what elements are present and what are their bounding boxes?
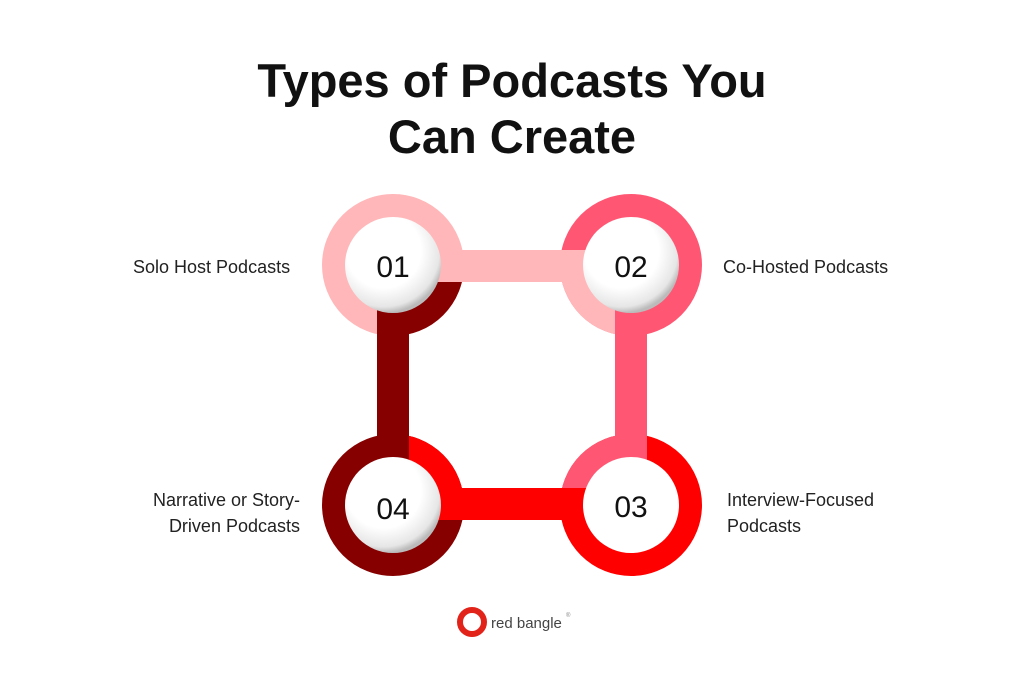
node 03: 03	[614, 491, 648, 524]
label 04: Driven Podcasts	[169, 516, 300, 536]
title	[257, 54, 767, 163]
title: Can Create	[388, 110, 636, 163]
logo: ®	[566, 612, 571, 619]
label 03: Interview-Focused	[727, 490, 874, 510]
label 04: Narrative or Story-	[153, 490, 300, 510]
label 02: Co-Hosted Podcasts	[723, 257, 888, 277]
label 03	[727, 490, 874, 536]
logo	[460, 610, 571, 634]
label 03: Podcasts	[727, 516, 801, 536]
node 04	[345, 457, 441, 553]
node 01	[345, 217, 441, 313]
title: Types of Podcasts You	[257, 54, 767, 107]
connectors	[400, 250, 615, 282]
rings	[338, 210, 448, 320]
label 04	[153, 490, 300, 536]
label 01: Solo Host Podcasts	[133, 257, 290, 277]
node 04: 04	[376, 493, 410, 526]
node 02: 02	[614, 251, 648, 284]
node 01: 01	[376, 251, 410, 284]
node 03	[583, 457, 679, 553]
diagram	[322, 194, 702, 637]
node 02	[583, 217, 679, 313]
logo: red bangle	[491, 615, 562, 632]
